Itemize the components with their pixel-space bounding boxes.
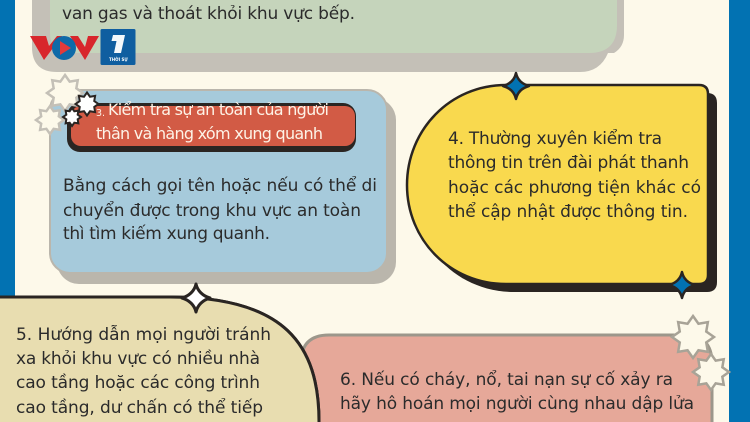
icon: VOV1 logo [30,29,136,65]
text: step 3 body: Bằng cách gọi tên hoặc nếu có thể di [63,175,377,196]
text: step 6 body: 6. Nếu có cháy, nổ, tai nạn sự cố xảy ra [340,369,673,390]
text: step 5 body: cao tầng, dư chấn có thể tiếp [16,397,263,418]
heading: step 3 red banner: thân và hàng xóm xung quanh [96,124,323,143]
text: step 4 body: thể cập nhật được thông tin. [448,201,688,222]
heading: step 3 red banner: 3. [96,108,105,119]
panel: step 4 yellow card [407,85,717,292]
right blue side band [729,0,750,422]
text: step 3 body: thì tìm kiếm xung quanh. [63,223,270,244]
text: step 4 body: 4. Thường xuyên kiểm tra [448,128,662,149]
text: step 5 body: 5. Hướng dẫn mọi người tránh [16,324,271,345]
left blue side band [0,0,15,300]
icon: star cluster top left of step 3 [36,75,98,134]
text: step 4 body: thông tin trên đài phát thanh [448,153,689,173]
text: step 3 body: chuyển được trong khu vực an toàn [63,200,361,221]
text: step 4 body [448,128,701,222]
icon: white sparkle on top of step 5 [182,284,210,312]
text: top card last line: van gas và thoát khỏi khu vực bếp. [62,3,355,24]
text: step 5 body: xa khỏi khu vực có nhiều nhà [16,348,260,369]
heading: step 3 red banner: Kiểm tra sự an toàn của người [108,100,329,119]
text: step 3 body [63,175,377,244]
panel: top green card [32,0,624,72]
panel: step 5 beige card [0,297,319,422]
panel: step 3 blue card [50,90,396,284]
icon: blue sparkle on top of step 4 [503,73,529,99]
icon: VOV1 logo: THỜI SỰ [109,57,128,62]
icon: star cluster top right of step 6 [672,316,729,390]
icon: blue sparkle on bottom of step 4 [669,272,695,298]
heading: step 3 red banner [67,100,356,152]
panel: step 6 pink card [301,335,712,422]
text: step 5 body [16,324,271,418]
text: step 6 body: hãy hô hoán mọi người cùng nhau dập lửa [340,394,694,414]
text: step 6 body [340,369,694,414]
text: step 5 body: cao tầng hoặc các công trình [16,372,260,393]
text: step 4 body: hoặc các phương tiện khác có [448,178,701,198]
